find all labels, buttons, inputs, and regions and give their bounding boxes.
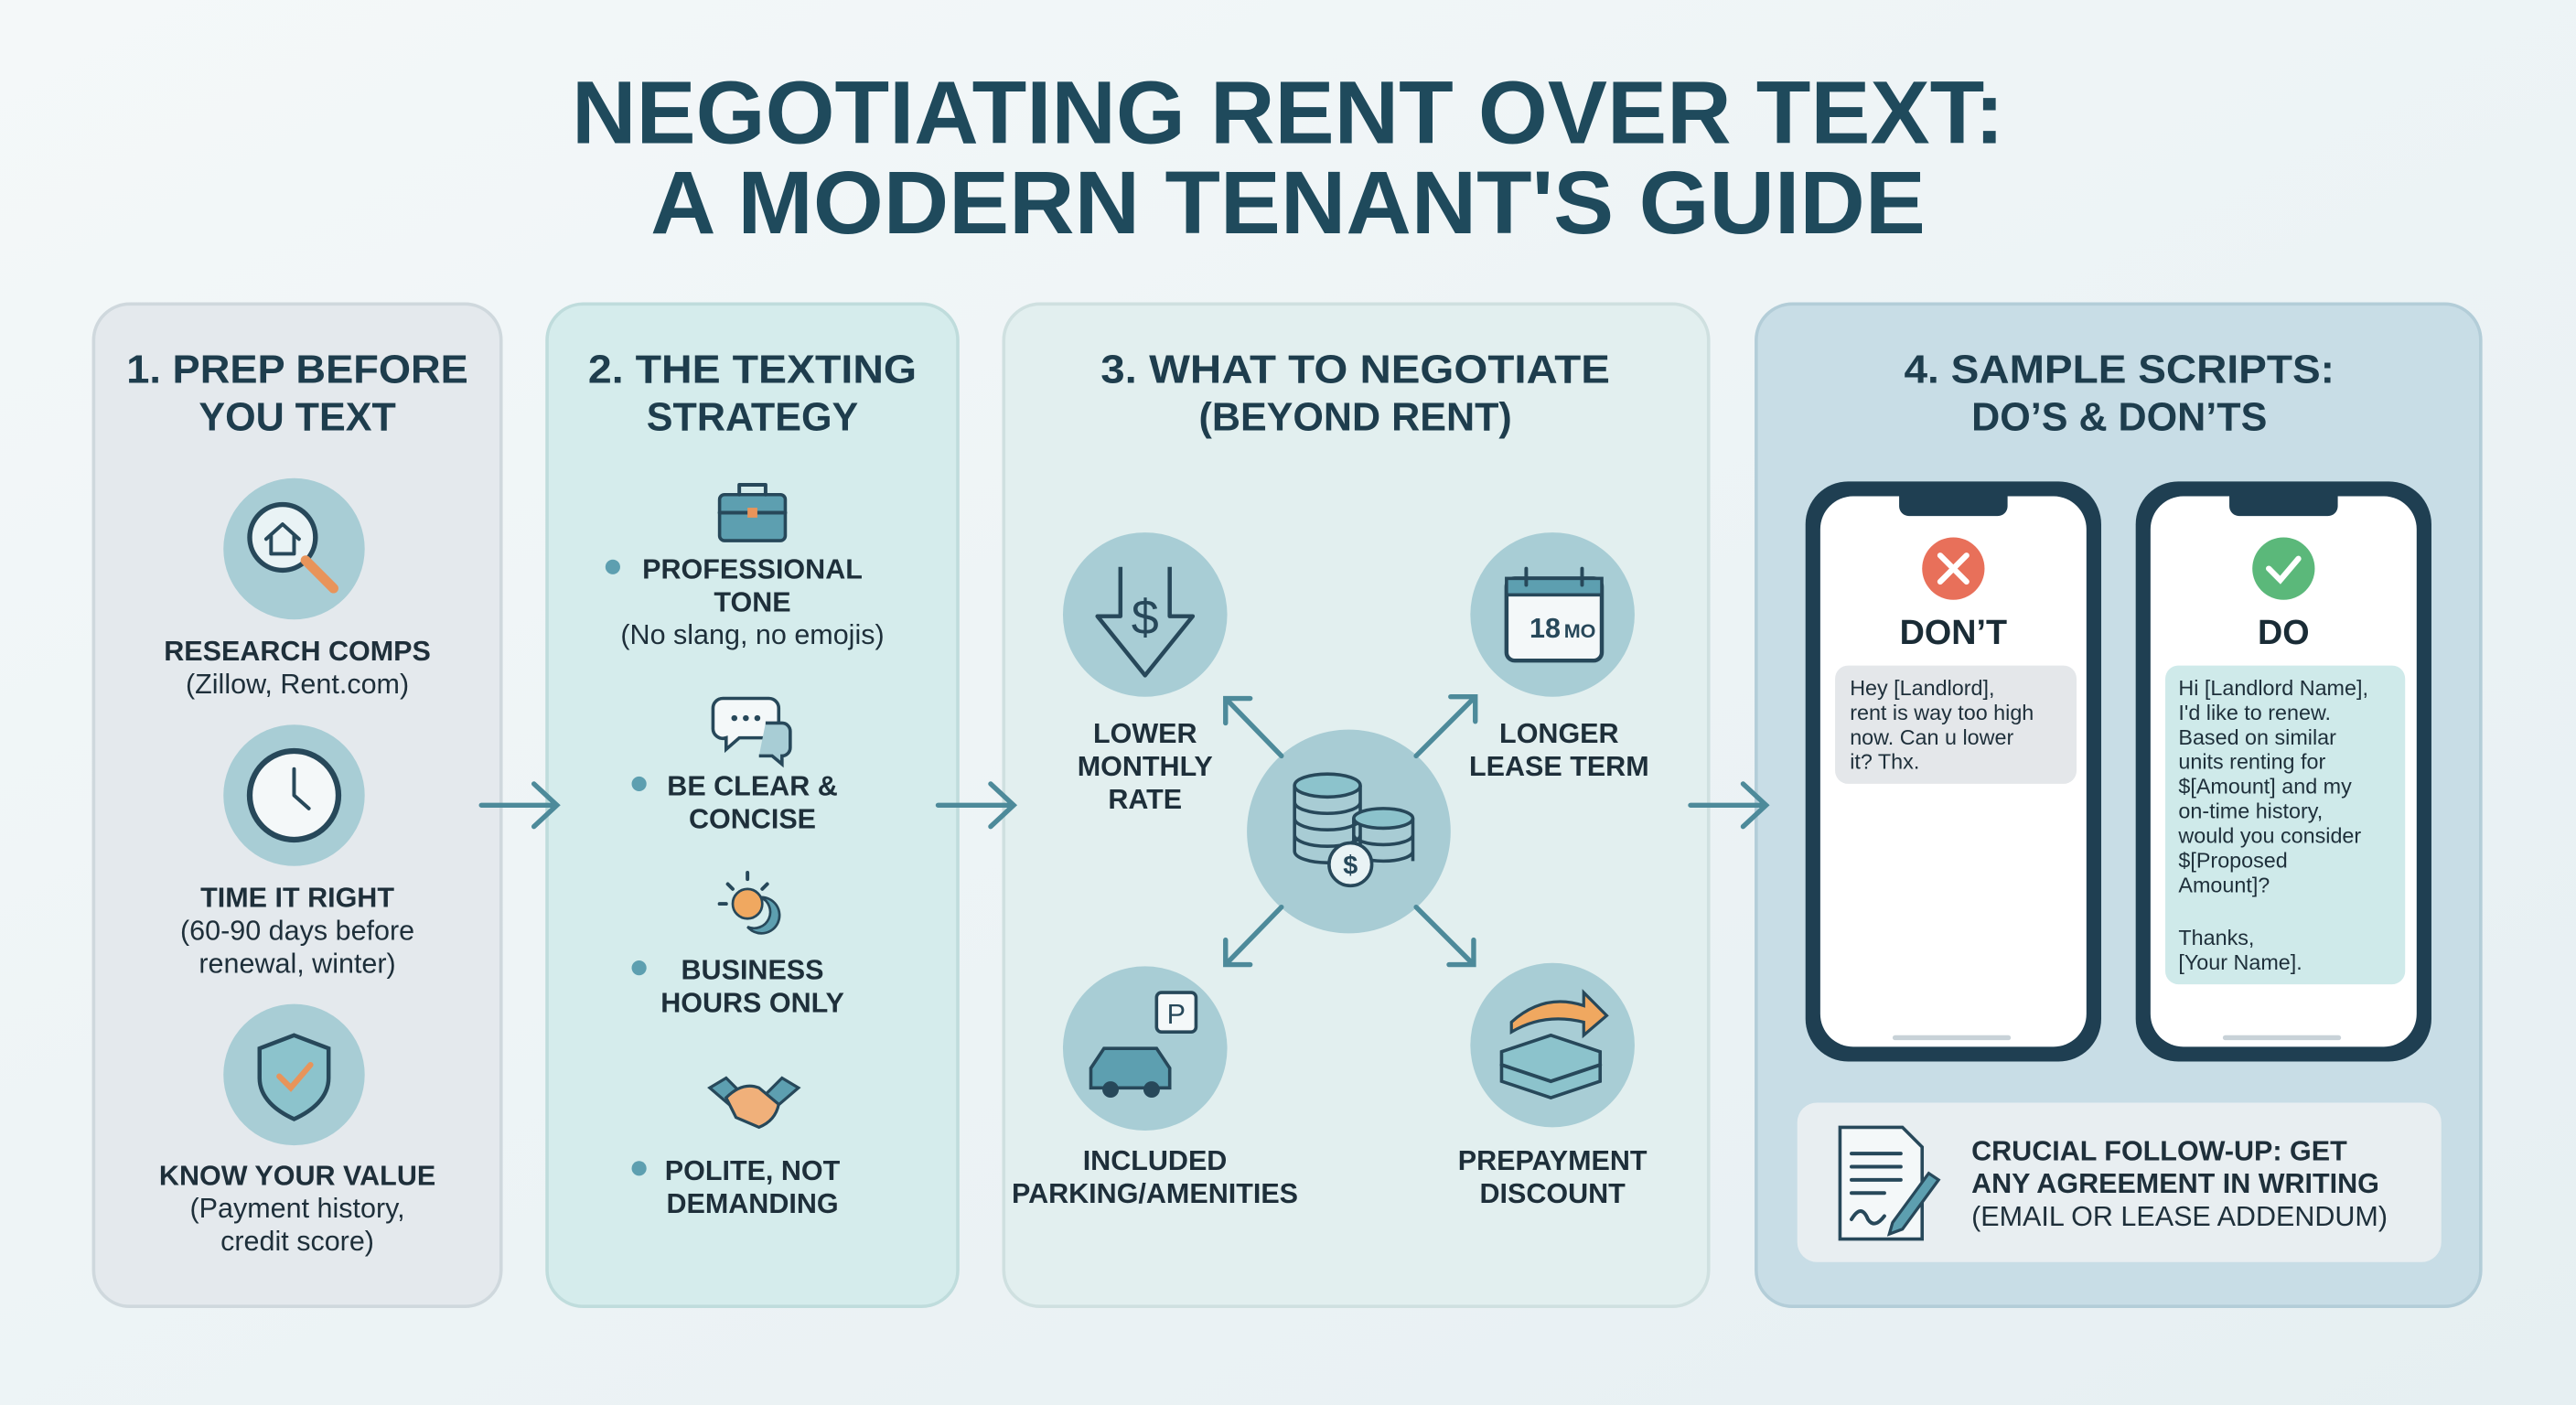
bubble: good message: $[Proposed	[2178, 849, 2288, 873]
text: know your value: KNOW YOUR VALUE	[159, 1160, 435, 1191]
bubble: good message: Based on similar	[2178, 725, 2336, 749]
item: clear concise: CONCISE	[689, 803, 816, 834]
icon: briefcase	[720, 485, 785, 541]
heading: panel 3: (BEYOND RENT)	[1198, 396, 1512, 440]
bubble: bad message	[1835, 666, 2077, 784]
title	[572, 62, 2004, 252]
option: lower monthly rate: RATE	[1108, 784, 1182, 815]
arrow 1	[481, 784, 557, 827]
option: prepayment: DISCOUNT	[1479, 1178, 1626, 1209]
bubble: good message: would you consider	[2177, 824, 2361, 848]
bubble: bad message: rent is way too high	[1850, 701, 2034, 724]
item: professional tone: PROFESSIONAL	[642, 553, 863, 585]
icon: center coins: $	[1343, 852, 1358, 881]
bubble: good message: I'd like to renew.	[2178, 701, 2331, 724]
heading: panel 4: 4. SAMPLE SCRIPTS:	[1904, 349, 2334, 392]
heading: panel 4: DO’S & DON’TS	[1971, 396, 2267, 440]
bubble: good message: Amount]?	[2178, 873, 2270, 896]
title: NEGOTIATING RENT OVER TEXT:	[572, 62, 2004, 162]
option: longer lease term: LEASE TERM	[1469, 751, 1649, 782]
item: business hours: HOURS ONLY	[660, 988, 844, 1019]
heading: panel 2: STRATEGY	[647, 396, 858, 440]
phone: don't	[1806, 481, 2101, 1062]
item: professional tone: TONE	[714, 586, 791, 617]
bubble: good message: $[Amount] and my	[2178, 775, 2352, 799]
phone: do: DO	[2258, 613, 2310, 651]
phone: do	[2136, 481, 2431, 1062]
callout: follow-up: ANY AGREEMENT IN WRITING	[1971, 1168, 2379, 1199]
item: polite not demanding	[632, 1155, 841, 1219]
text: time it right: renewal, winter)	[199, 949, 396, 980]
option: parking: INCLUDED	[1083, 1145, 1227, 1176]
callout: follow-up	[1798, 1102, 2442, 1262]
heading: panel 4	[1904, 349, 2334, 440]
option: longer lease term: MO	[1564, 619, 1595, 642]
panel: texting strategy	[547, 304, 958, 1306]
item: clear concise: BE CLEAR &	[667, 770, 838, 802]
heading: panel 3	[1100, 349, 1610, 440]
option: lower monthly rate: MONTHLY	[1078, 751, 1213, 782]
icon: sun and moon	[720, 873, 779, 933]
item: polite not demanding: DEMANDING	[666, 1188, 839, 1219]
item: business hours	[632, 955, 844, 1019]
icon: shield	[223, 1004, 365, 1145]
bubble: good message	[2165, 666, 2405, 984]
text: research comps: RESEARCH COMPS	[164, 636, 431, 667]
heading: panel 2: 2. THE TEXTING	[588, 349, 917, 392]
icon: chat bubbles	[713, 699, 790, 764]
text: time it right: (60-90 days before	[180, 916, 414, 947]
bubble: bad message: now. Can u lower	[1850, 725, 2013, 749]
option: lower monthly rate	[1063, 532, 1228, 815]
heading: panel 1: YOU TEXT	[199, 396, 396, 440]
bubble: bad message: it? Thx.	[1850, 750, 1919, 774]
item: professional tone	[606, 553, 885, 650]
text: know your value: (Payment history,	[190, 1193, 405, 1224]
panel: prep before you text	[93, 304, 501, 1306]
item: professional tone: (No slang, no emojis)	[620, 619, 885, 650]
option: lower monthly rate: $	[1132, 590, 1159, 645]
option: longer lease term	[1469, 532, 1649, 782]
panel: what to negotiate	[1004, 304, 1709, 1306]
heading: panel 1: 1. PREP BEFORE	[126, 349, 468, 392]
heading: panel 3: 3. WHAT TO NEGOTIATE	[1100, 349, 1610, 392]
option: parking	[1012, 966, 1298, 1209]
option: parking: P	[1167, 999, 1186, 1030]
option: prepayment: PREPAYMENT	[1458, 1145, 1648, 1176]
arrow 3	[1690, 784, 1766, 827]
item: clear concise	[632, 770, 838, 834]
bubble: good message: Thanks,	[2178, 926, 2254, 949]
bubble: bad message: Hey [Landlord],	[1850, 676, 1994, 700]
text: research comps: (Zillow, Rent.com)	[186, 669, 409, 700]
icon: check	[2252, 537, 2314, 600]
option: prepayment	[1458, 963, 1648, 1209]
text: know your value	[159, 1160, 435, 1257]
heading: panel 1	[126, 349, 468, 440]
option: longer lease term: LONGER	[1499, 718, 1619, 749]
arrow 2	[938, 784, 1014, 827]
phone: don't: DON’T	[1900, 613, 2007, 651]
option: longer lease term: 18	[1530, 613, 1561, 644]
heading: panel 2	[588, 349, 917, 440]
icon: signed document	[1840, 1127, 1938, 1239]
item: polite not demanding: POLITE, NOT	[665, 1155, 841, 1186]
text: time it right	[180, 883, 414, 980]
callout: follow-up: CRUCIAL FOLLOW-UP: GET	[1971, 1135, 2347, 1166]
option: parking: PARKING/AMENITIES	[1012, 1178, 1298, 1209]
bubble: good message: [Your Name].	[2178, 950, 2302, 974]
bubble: good message: units renting for	[2178, 750, 2325, 774]
bubble: good message: on-time history,	[2178, 799, 2323, 823]
text: research comps	[164, 636, 431, 700]
text: time it right: TIME IT RIGHT	[200, 883, 394, 914]
item: business hours: BUSINESS	[682, 955, 824, 986]
arrows: center to options	[1226, 697, 1476, 965]
title: A MODERN TENANT'S GUIDE	[650, 153, 1926, 252]
option: lower monthly rate: LOWER	[1093, 718, 1197, 749]
icon: clock	[223, 724, 365, 866]
panel: sample scripts	[1756, 304, 2481, 1306]
bubble: good message: Hi [Landlord Name],	[2178, 676, 2368, 700]
icon: handshake	[710, 1078, 799, 1127]
icon: x	[1922, 537, 1984, 600]
callout: follow-up: (EMAIL OR LEASE ADDENDUM)	[1971, 1201, 2388, 1232]
icon: magnifier house	[223, 478, 365, 619]
text: know your value: credit score)	[220, 1226, 374, 1257]
icon: center coins	[1247, 730, 1451, 933]
